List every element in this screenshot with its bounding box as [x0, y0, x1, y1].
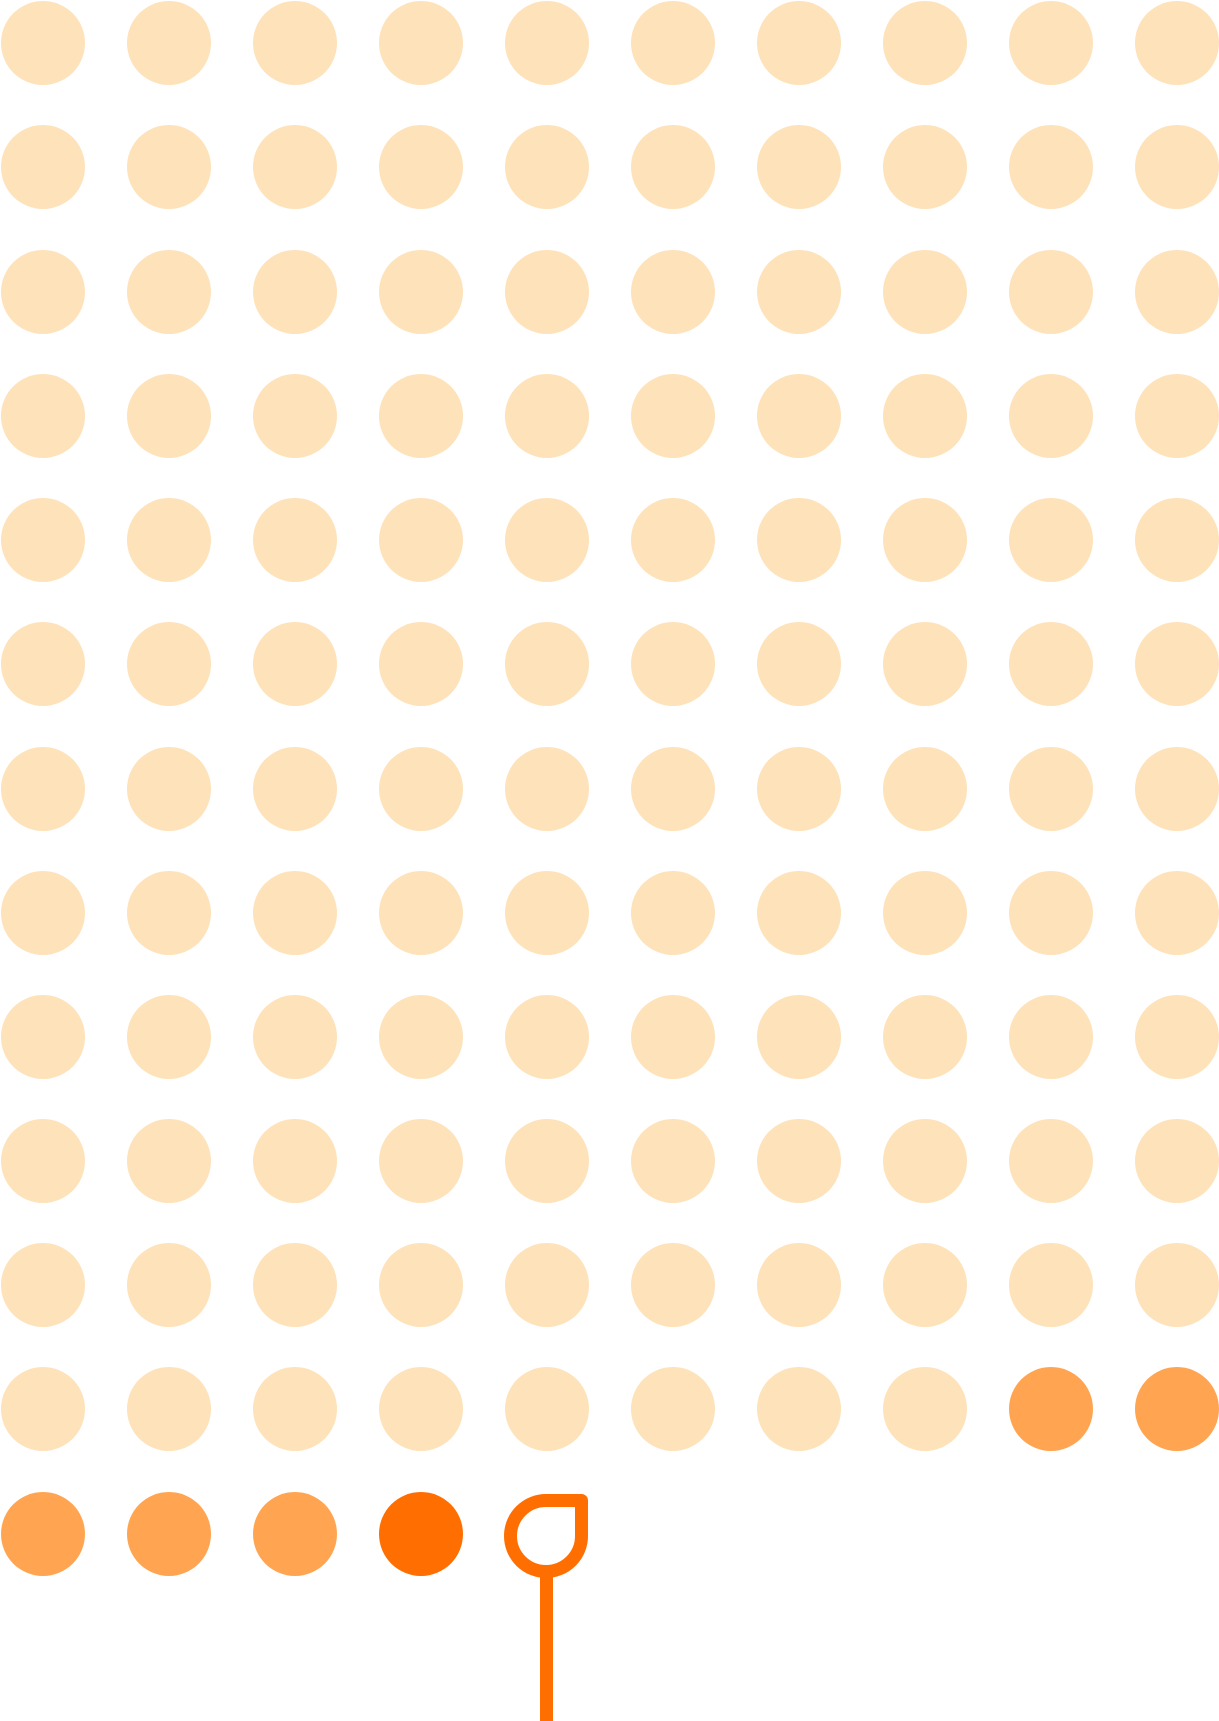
current dot	[379, 1492, 463, 1576]
pin marker	[510, 1500, 582, 1721]
highlighted dots	[1, 1367, 1219, 1576]
